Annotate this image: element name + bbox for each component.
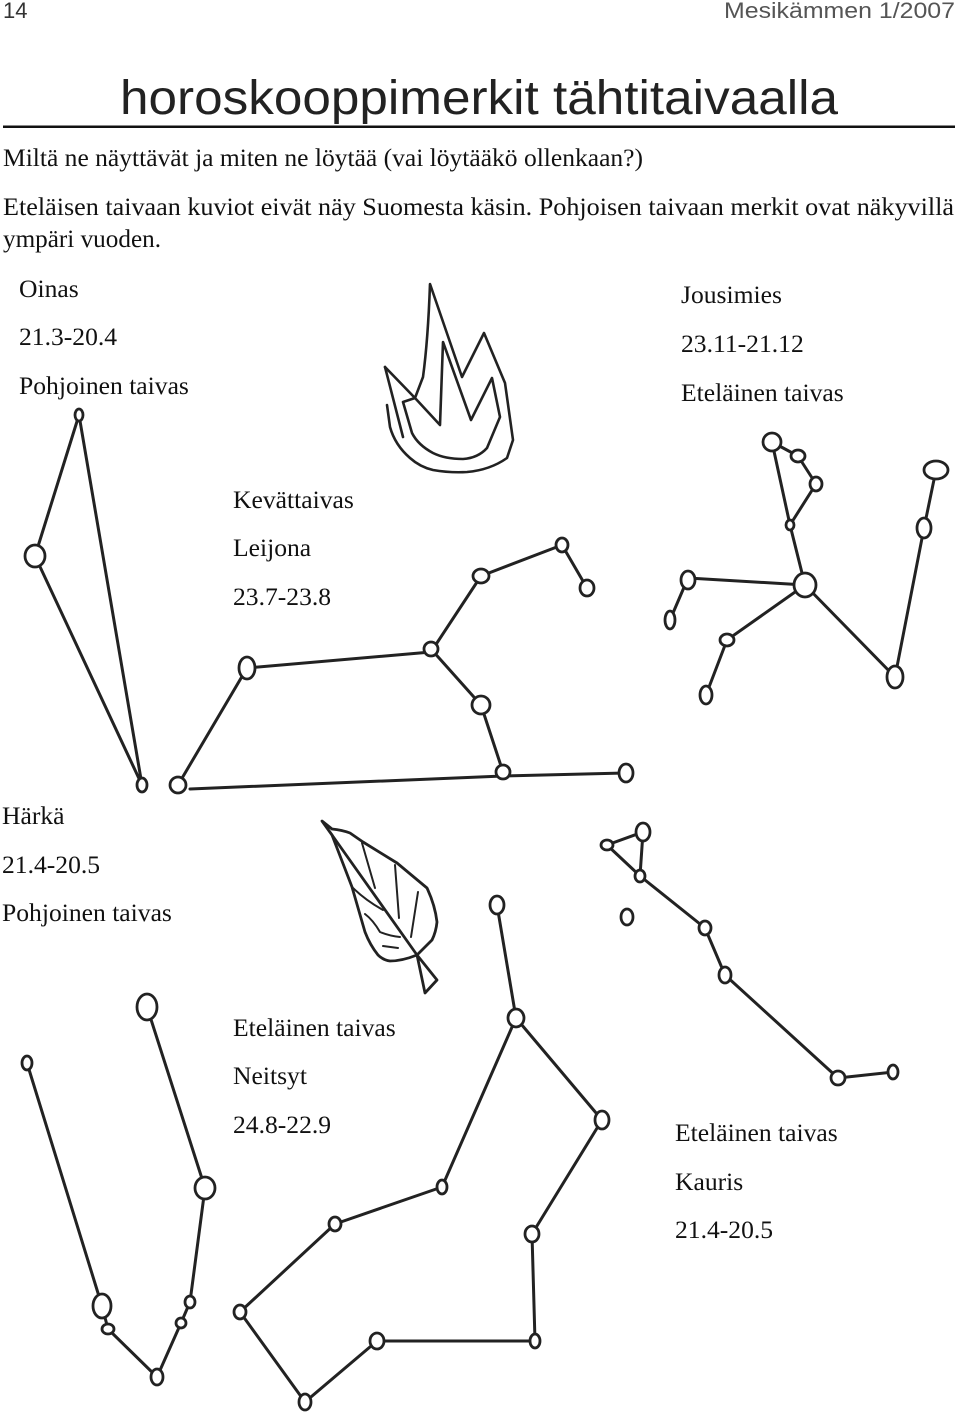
label: Kauris: 21.4-20.5 [675, 1215, 773, 1244]
label: Leijona: Kevättaivas [233, 485, 354, 514]
label: Leijona: Leijona [233, 533, 312, 562]
constellation: Kauris [601, 823, 898, 1085]
label: Oinas [19, 274, 189, 400]
label: Kauris: Eteläinen taivas [675, 1118, 838, 1147]
label: Oinas: Oinas [19, 274, 79, 303]
label: Härkä: Härkä [2, 801, 65, 830]
title rule [3, 126, 955, 128]
label: Leijona: 23.7-23.8 [233, 582, 331, 611]
label: Neitsyt: Neitsyt [233, 1061, 307, 1090]
label: Härkä: 21.4-20.5 [2, 850, 100, 879]
constellation: Leijona [170, 538, 633, 793]
label: Jousimies: Jousimies [681, 280, 782, 309]
intro text: ympäri vuoden. [3, 224, 161, 253]
label: Kauris [675, 1118, 838, 1244]
constellation: Neitsyt [234, 896, 609, 1410]
label: Oinas: Pohjoinen taivas [19, 371, 189, 400]
label: Jousimies: Eteläinen taivas [681, 378, 844, 407]
intro text: Eteläisen taivaan kuviot eivät näy Suomesta käsin. Pohjoisen taivaan merkit ovat näkyvillä [3, 192, 955, 221]
constellation: Härkä [22, 994, 215, 1385]
label: Jousimies: 23.11-21.12 [681, 329, 804, 358]
label: Neitsyt [233, 1013, 396, 1139]
label: Leijona [233, 485, 354, 611]
label: Oinas: 21.3-20.4 [19, 322, 117, 351]
label: Kauris: Kauris [675, 1167, 743, 1196]
label: Härkä: Pohjoinen taivas [2, 898, 172, 927]
title: horoskooppimerkit tähtitaivaalla [120, 72, 838, 125]
icon: flame [385, 284, 513, 472]
icon: leaf [322, 821, 437, 993]
label: Jousimies [681, 280, 844, 407]
constellation: Oinas [25, 409, 147, 792]
constellation: Jousimies [665, 433, 948, 704]
label: Neitsyt: 24.8-22.9 [233, 1110, 331, 1139]
label: Neitsyt: Eteläinen taivas [233, 1013, 396, 1042]
intro text [3, 143, 955, 253]
label: Härkä [2, 801, 172, 927]
intro text: Miltä ne näyttävät ja miten ne löytää (vai löytääkö ollenkaan?) [3, 143, 643, 172]
